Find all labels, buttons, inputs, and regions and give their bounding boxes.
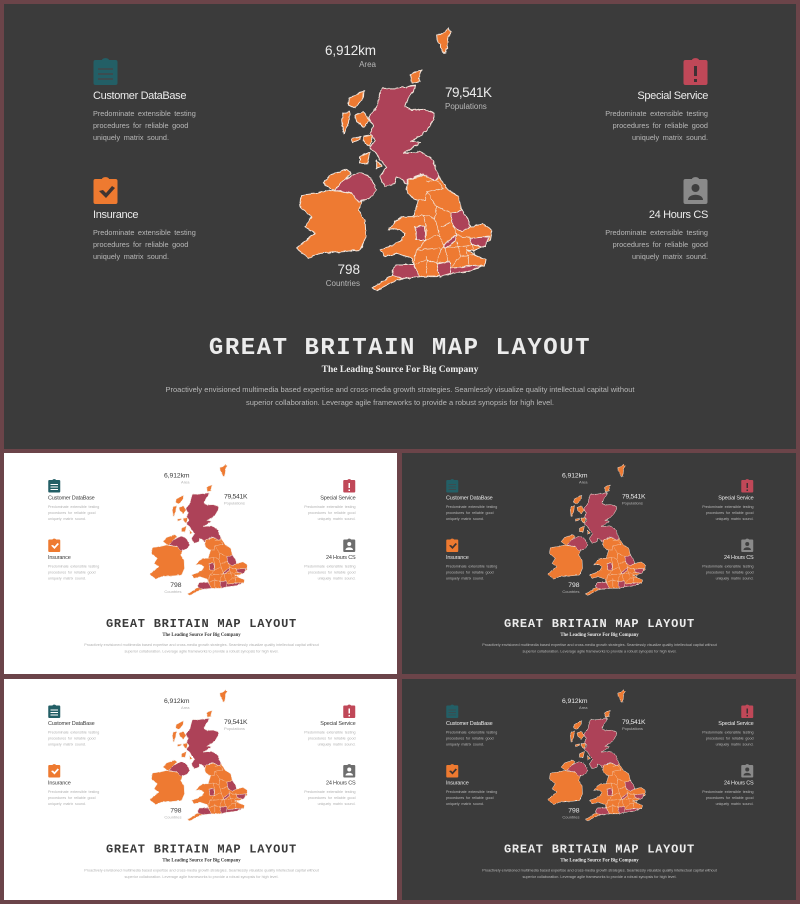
text: customer database: uniquely matrix sound. <box>48 517 86 521</box>
icon: customer database <box>94 58 118 85</box>
text: insurance <box>48 564 99 580</box>
description <box>166 385 635 407</box>
text: insurance: procedures for reliable good <box>48 796 96 800</box>
text: customer database <box>93 109 196 142</box>
text: 24 hours cs <box>702 564 754 580</box>
subtitle: The Leading Source For Big Company <box>162 858 241 864</box>
text: special service: Predominate extensible testing <box>304 730 356 734</box>
text: special service: procedures for reliable good <box>706 736 754 740</box>
text: special service: Predominate extensible testing <box>605 109 708 118</box>
stat: populations: Populations <box>622 500 643 506</box>
heading: customer database: Customer DataBase <box>48 496 95 502</box>
heading: customer database: Customer DataBase <box>93 90 186 102</box>
icon: special service <box>343 479 355 492</box>
heading: 24 hours cs: 24 Hours CS <box>724 780 754 786</box>
text: 24 hours cs: procedures for reliable good <box>308 570 356 574</box>
text: 24 hours cs <box>605 228 708 261</box>
stat: populations <box>622 719 646 731</box>
title: GREAT BRITAIN MAP LAYOUT <box>106 617 297 631</box>
icon: special service <box>684 58 708 85</box>
stat: countries <box>562 582 580 594</box>
text: insurance <box>48 790 99 806</box>
text: customer database <box>48 505 99 521</box>
description: Proactively envisioned multimedia based expertise and cross-media growth strategies. Seamlessly visualize quality intellectual capital without <box>482 643 718 647</box>
text: insurance: uniquely matrix sound. <box>446 802 484 806</box>
icon: 24 hours cs <box>684 177 708 204</box>
stat: populations <box>622 494 646 506</box>
icon: customer database <box>48 705 60 718</box>
map: great britain and ireland <box>548 464 646 595</box>
text: 24 hours cs: uniquely matrix sound. <box>716 576 754 580</box>
heading: customer database: Customer DataBase <box>446 721 493 727</box>
text: 24 hours cs: uniquely matrix sound. <box>716 802 754 806</box>
icon: 24 hours cs <box>741 764 753 778</box>
stat: populations: Populations <box>224 726 245 731</box>
text: special service: uniquely matrix sound. <box>632 133 708 142</box>
text: special service: procedures for reliable good <box>308 736 356 740</box>
heading: insurance: Insurance <box>48 780 71 786</box>
stat: area <box>325 43 377 69</box>
subtitle: The Leading Source For Big Company <box>560 633 639 638</box>
stat: area: 6,912km <box>325 43 376 58</box>
stat: area: 6,912km <box>164 698 190 705</box>
text: insurance: Predominate extensible testing <box>48 564 99 568</box>
panel: main dark slide <box>4 4 796 449</box>
text: 24 hours cs: uniquely matrix sound. <box>318 576 356 580</box>
stat: area: Area <box>359 60 377 69</box>
stat: area: 6,912km <box>562 698 588 705</box>
stat: populations: 79,541K <box>622 494 646 500</box>
panel: white slide bottom left <box>4 679 397 900</box>
description: superior collaboration. Leverage agile frameworks to provide a robust synopsis for high level. <box>522 650 676 654</box>
heading: 24 hours cs: 24 Hours CS <box>724 555 754 561</box>
stat: area: Area <box>181 480 190 484</box>
icon: customer database <box>48 479 60 492</box>
description: Proactively envisioned multimedia based expertise and cross-media growth strategies. Seamlessly visualize quality intellectual capital without <box>166 385 635 394</box>
text: special service <box>702 505 754 521</box>
text: insurance: Predominate extensible testing <box>48 790 99 794</box>
description: Proactively envisioned multimedia based expertise and cross-media growth strategies. Seamlessly visualize quality intellectual capital without <box>482 868 718 872</box>
text: customer database: procedures for reliable good <box>93 121 188 130</box>
text: customer database: procedures for reliable good <box>446 511 494 515</box>
text: customer database: uniquely matrix sound. <box>446 742 484 746</box>
panel: dark slide top right <box>402 453 796 674</box>
subtitle: The Leading Source For Big Company <box>322 365 479 375</box>
stat: countries: Countries <box>562 589 580 594</box>
description: superior collaboration. Leverage agile frameworks to provide a robust synopsis for high level. <box>246 398 554 407</box>
stat: populations: Populations <box>224 500 245 506</box>
heading: insurance: Insurance <box>93 209 138 221</box>
stat: area <box>164 472 190 484</box>
text: insurance: procedures for reliable good <box>93 240 188 249</box>
text: insurance: procedures for reliable good <box>446 570 494 574</box>
text: special service <box>304 730 356 746</box>
text: 24 hours cs: procedures for reliable good <box>706 570 754 574</box>
text: insurance: Predominate extensible testing <box>446 790 497 794</box>
description: superior collaboration. Leverage agile frameworks to provide a robust synopsis for high level. <box>124 650 278 654</box>
icon: special service <box>343 705 355 718</box>
text: customer database <box>446 505 497 521</box>
text: customer database: Predominate extensible testing <box>93 109 196 118</box>
heading: special service: Special Service <box>637 90 708 102</box>
text: special service: uniquely matrix sound. <box>318 742 356 746</box>
stat: populations: 79,541K <box>622 719 646 726</box>
text: customer database: procedures for reliable good <box>446 736 494 740</box>
text: insurance: uniquely matrix sound. <box>48 576 86 580</box>
text: customer database: uniquely matrix sound. <box>446 517 484 521</box>
title: GREAT BRITAIN MAP LAYOUT <box>106 842 297 856</box>
stat: populations <box>224 719 248 731</box>
stat: countries: 798 <box>568 808 580 814</box>
icon: special service <box>741 479 753 492</box>
text: 24 hours cs: procedures for reliable good <box>613 240 708 249</box>
heading: special service: Special Service <box>718 721 754 727</box>
heading: insurance: Insurance <box>446 780 469 786</box>
stat: countries: 798 <box>337 262 360 277</box>
icon: insurance <box>446 539 458 552</box>
stat: countries <box>562 808 580 820</box>
description <box>84 868 320 879</box>
text: 24 hours cs <box>304 790 356 806</box>
text: insurance: procedures for reliable good <box>446 796 494 800</box>
text: insurance <box>93 228 196 261</box>
text: 24 hours cs <box>702 790 754 806</box>
text: customer database <box>446 730 497 746</box>
text: customer database: uniquely matrix sound. <box>48 742 86 746</box>
text: customer database: Predominate extensible testing <box>446 730 497 734</box>
panel: white slide top left <box>4 453 397 674</box>
stat: countries: Countries <box>326 279 360 288</box>
text: customer database: uniquely matrix sound. <box>93 133 169 142</box>
description: superior collaboration. Leverage agile frameworks to provide a robust synopsis for high level. <box>124 875 278 879</box>
text: insurance: procedures for reliable good <box>48 570 96 574</box>
text: special service: procedures for reliable good <box>308 511 356 515</box>
text: insurance: Predominate extensible testing <box>446 564 497 568</box>
panel: dark slide bottom right <box>402 679 796 900</box>
text: customer database: Predominate extensible testing <box>48 730 99 734</box>
icon: special service <box>741 705 753 718</box>
text: special service: Predominate extensible testing <box>304 505 356 509</box>
text: special service: procedures for reliable good <box>706 511 754 515</box>
text: 24 hours cs: Predominate extensible testing <box>304 790 356 794</box>
icon: insurance <box>48 764 60 778</box>
icon: 24 hours cs <box>741 539 753 552</box>
text: special service: Predominate extensible testing <box>702 730 754 734</box>
text: insurance: Predominate extensible testing <box>93 228 196 237</box>
text: insurance: uniquely matrix sound. <box>93 252 169 261</box>
text: 24 hours cs: uniquely matrix sound. <box>318 802 356 806</box>
icon: 24 hours cs <box>343 764 355 778</box>
stat: populations: 79,541K <box>224 494 248 500</box>
stat: populations <box>224 494 248 506</box>
text: special service: uniquely matrix sound. <box>716 517 754 521</box>
stat: countries: Countries <box>562 814 580 820</box>
subtitle: The Leading Source For Big Company <box>162 633 241 638</box>
text: 24 hours cs: procedures for reliable good <box>706 796 754 800</box>
text: insurance: uniquely matrix sound. <box>446 576 484 580</box>
text: customer database <box>48 730 99 746</box>
stat: countries: Countries <box>164 589 182 594</box>
heading: 24 hours cs: 24 Hours CS <box>326 555 356 561</box>
description <box>84 643 320 654</box>
text: 24 hours cs: Predominate extensible testing <box>702 564 754 568</box>
stat: countries <box>164 582 182 594</box>
heading: special service: Special Service <box>718 496 754 502</box>
text: customer database: procedures for reliable good <box>48 511 96 515</box>
text: 24 hours cs: Predominate extensible testing <box>605 228 708 237</box>
text: special service <box>304 505 356 521</box>
text: insurance <box>446 790 497 806</box>
text: special service: procedures for reliable good <box>613 121 708 130</box>
stat: area <box>562 472 588 484</box>
stat: countries <box>164 808 182 820</box>
text: customer database: Predominate extensible testing <box>446 505 497 509</box>
icon: customer database <box>446 705 458 718</box>
text: special service: uniquely matrix sound. <box>716 742 754 746</box>
title: GREAT BRITAIN MAP LAYOUT <box>209 335 591 362</box>
icon: insurance <box>48 539 60 552</box>
map: great britain and ireland <box>548 690 646 821</box>
text: 24 hours cs <box>304 564 356 580</box>
heading: customer database: Customer DataBase <box>48 721 95 727</box>
text: 24 hours cs: procedures for reliable good <box>308 796 356 800</box>
stat: countries: 798 <box>568 582 580 589</box>
subtitle: The Leading Source For Big Company <box>560 858 639 864</box>
text: 24 hours cs: Predominate extensible testing <box>304 564 356 568</box>
stat: populations: 79,541K <box>445 85 492 100</box>
text: 24 hours cs: uniquely matrix sound. <box>632 252 708 261</box>
text: customer database: Predominate extensible testing <box>48 505 99 509</box>
stat: countries <box>326 262 360 288</box>
stat: area: 6,912km <box>562 472 588 480</box>
stat: populations <box>445 85 492 111</box>
text: special service: Predominate extensible testing <box>702 505 754 509</box>
stat: area: 6,912km <box>164 472 190 480</box>
icon: insurance <box>446 764 458 778</box>
description: Proactively envisioned multimedia based expertise and cross-media growth strategies. Seamlessly visualize quality intellectual capital without <box>84 868 320 872</box>
stat: countries: 798 <box>170 582 182 589</box>
text: special service <box>605 109 708 142</box>
stat: countries: 798 <box>170 808 182 814</box>
stat: area: Area <box>181 705 190 710</box>
stat: populations: Populations <box>622 726 643 731</box>
stat: area <box>562 698 588 710</box>
stat: area: Area <box>579 705 588 710</box>
description <box>482 643 718 654</box>
text: insurance: uniquely matrix sound. <box>48 802 86 806</box>
text: insurance <box>446 564 497 580</box>
heading: 24 hours cs: 24 Hours CS <box>326 780 356 786</box>
heading: 24 hours cs: 24 Hours CS <box>649 209 708 221</box>
text: special service <box>702 730 754 746</box>
description: superior collaboration. Leverage agile frameworks to provide a robust synopsis for high level. <box>522 875 676 879</box>
text: 24 hours cs: Predominate extensible testing <box>702 790 754 794</box>
stat: area: Area <box>579 480 588 484</box>
heading: special service: Special Service <box>320 496 356 502</box>
heading: customer database: Customer DataBase <box>446 496 493 502</box>
stat: populations: Populations <box>445 102 487 111</box>
stat: countries: Countries <box>164 814 182 820</box>
icon: customer database <box>446 479 458 492</box>
description <box>482 868 718 879</box>
heading: insurance: Insurance <box>48 555 71 561</box>
description: Proactively envisioned multimedia based expertise and cross-media growth strategies. Seamlessly visualize quality intellectual capital without <box>84 643 320 647</box>
map: great britain and ireland <box>150 464 248 595</box>
heading: special service: Special Service <box>320 721 356 727</box>
text: special service: uniquely matrix sound. <box>318 517 356 521</box>
map: great britain and ireland <box>150 690 248 821</box>
icon: insurance <box>94 177 118 204</box>
title: GREAT BRITAIN MAP LAYOUT <box>504 842 695 856</box>
text: customer database: procedures for reliable good <box>48 736 96 740</box>
map: great britain and ireland <box>297 28 492 291</box>
heading: insurance: Insurance <box>446 555 469 561</box>
title: GREAT BRITAIN MAP LAYOUT <box>504 617 695 631</box>
stat: populations: 79,541K <box>224 719 248 726</box>
icon: 24 hours cs <box>343 539 355 552</box>
stat: area <box>164 698 190 710</box>
